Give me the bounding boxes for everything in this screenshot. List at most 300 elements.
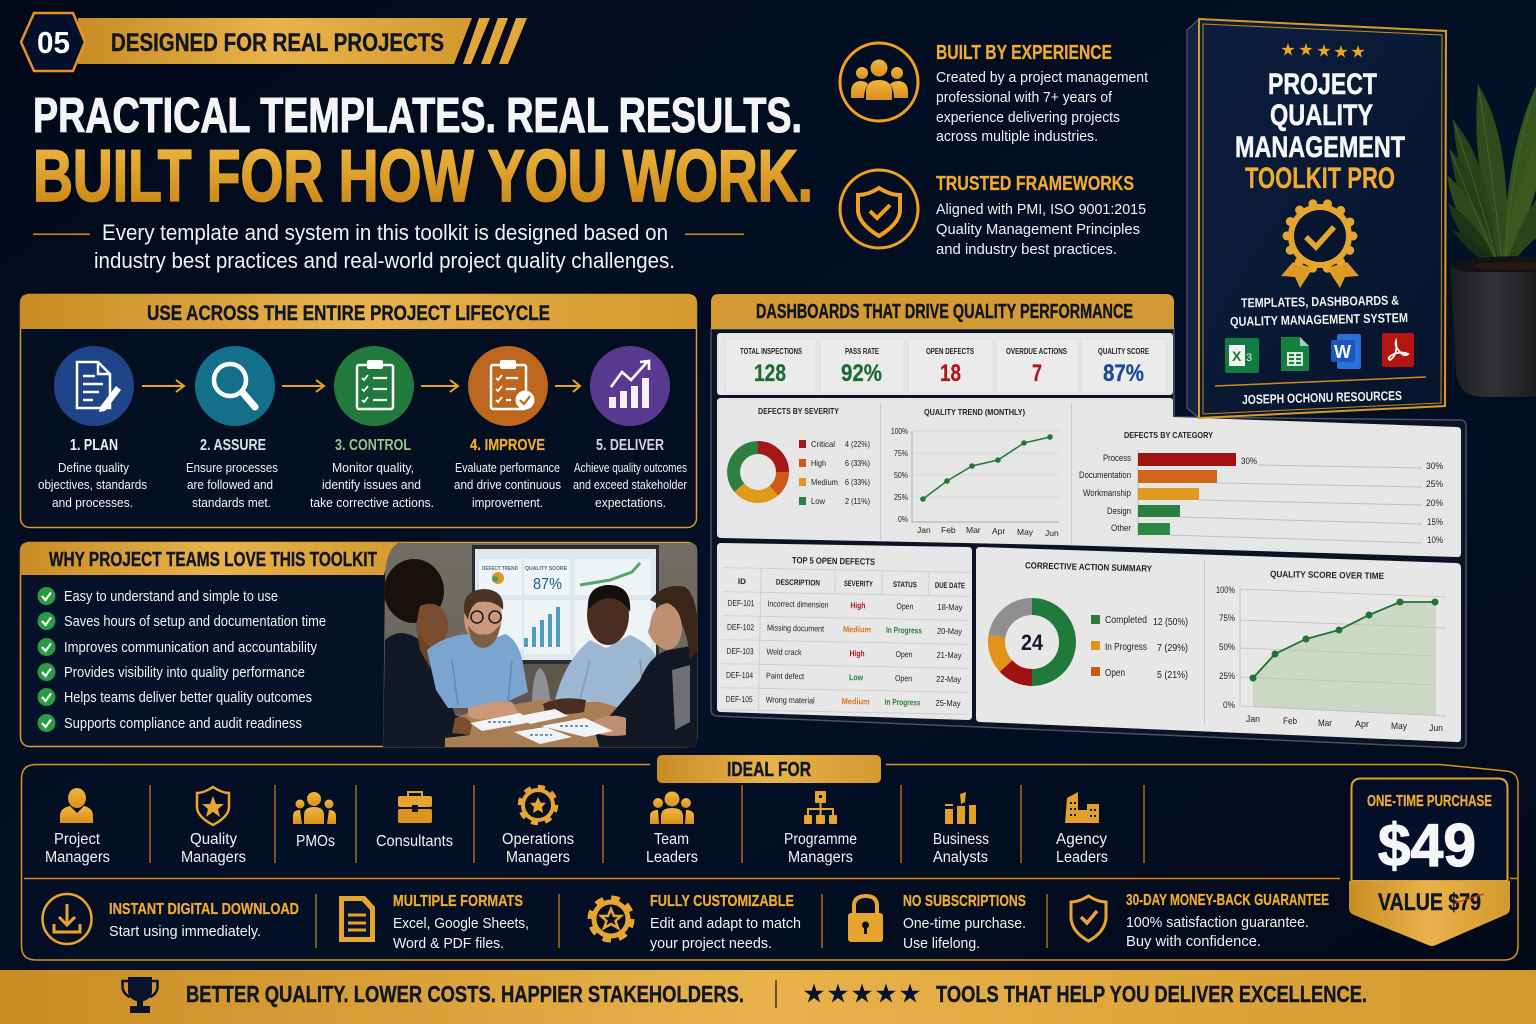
- benefit 4: Provides visibility into quality performance: [64, 665, 305, 681]
- chart: quality trend: [891, 407, 1059, 538]
- box publisher: JOSEPH OCHONU RESOURCES: [1242, 388, 1402, 407]
- panel header: [20, 542, 410, 575]
- table grid and cells: [720, 568, 970, 714]
- audience: consultants: [376, 792, 453, 850]
- step 4 improve: [454, 346, 561, 510]
- box stars: [1281, 43, 1365, 58]
- chart title: DEFECTS BY SEVERITY: [758, 406, 839, 416]
- dashboard heading: DASHBOARDS THAT DRIVE QUALITY PERFORMANCE: [756, 301, 1133, 323]
- table rows: Missing document: [767, 623, 825, 634]
- category labels: Design: [1107, 506, 1131, 516]
- step label: 5. DELIVER: [596, 437, 664, 454]
- icon: briefcase: [398, 792, 432, 823]
- trend axis labels: 100%: [891, 426, 908, 436]
- banner stripes: [463, 18, 527, 64]
- table: [445, 700, 697, 747]
- dashboard dark frame: [711, 329, 1466, 748]
- gold banner: [78, 18, 472, 64]
- step description: Monitor quality,: [332, 460, 414, 475]
- heading: TRUSTED FRAMEWORKS: [936, 173, 1134, 195]
- audience: operations managers: [502, 787, 574, 866]
- step description: objectives, standards: [38, 477, 147, 492]
- label: Managers: [506, 849, 570, 866]
- table rows: High: [849, 648, 865, 658]
- body text: professional with 7+ years of: [936, 89, 1113, 106]
- table rows: Medium: [843, 624, 871, 635]
- label: Consultants: [376, 833, 453, 850]
- icon: org chart: [804, 791, 837, 824]
- text: Buy with confidence.: [1126, 933, 1261, 950]
- table rows: DEF-103: [726, 646, 754, 656]
- action legend: 5 (21%): [1157, 670, 1188, 681]
- paper chart marks: [488, 722, 588, 735]
- icon: trophy: [122, 977, 158, 1013]
- label: Team: [654, 831, 689, 848]
- label: PMOs: [296, 833, 335, 850]
- benefit 3: Improves communication and accountability: [64, 640, 318, 656]
- score axes: [1240, 589, 1446, 716]
- credential: trusted frameworks: [840, 170, 1146, 258]
- label: [784, 831, 857, 866]
- category labels: 30%: [1241, 456, 1257, 466]
- text: Excel, Google Sheets,: [393, 915, 529, 932]
- label: [45, 831, 110, 866]
- body text: [936, 69, 1149, 145]
- icon: bars and flag: [945, 792, 976, 824]
- chart title: QUALITY TREND (MONTHLY): [924, 407, 1025, 417]
- score axis labels: 50%: [1219, 642, 1235, 653]
- footer tagline: BETTER QUALITY. LOWER COSTS. HAPPIER STAKEHOLDERS.: [186, 981, 744, 1007]
- step description: improvement.: [472, 495, 543, 510]
- chart: quality score over time: [1216, 569, 1446, 734]
- lower right charts background: [976, 547, 1461, 742]
- icon: Excel: [1225, 338, 1259, 373]
- wall screen: 87%: [533, 576, 562, 593]
- KPI total inspections: TOTAL INSPECTIONS: [740, 347, 802, 356]
- person 2: [427, 589, 528, 720]
- photo: team reviewing dashboard: [380, 540, 700, 750]
- text: Start using immediately.: [109, 923, 261, 940]
- audience: project managers: [45, 788, 110, 866]
- heading: BUILT BY EXPERIENCE: [936, 42, 1112, 64]
- severity legend: 6 (33%): [845, 458, 870, 468]
- table rows: Weld crack: [766, 646, 802, 657]
- footer stars: [804, 984, 920, 1002]
- arrow: [142, 380, 184, 392]
- step description: Achieve quality outcomes: [574, 460, 687, 475]
- score axis labels: 100%: [1216, 585, 1235, 596]
- step description: [310, 460, 434, 510]
- score axis labels: Mar: [1318, 718, 1332, 729]
- panel background: [20, 542, 696, 746]
- action legend: In Progress: [1105, 642, 1147, 653]
- table header row: DESCRIPTION: [776, 578, 820, 588]
- box inner gold border: [1203, 24, 1442, 414]
- table rows: In Progress: [885, 697, 921, 707]
- text: [1126, 914, 1309, 950]
- audience: team leaders: [646, 792, 698, 866]
- audience: quality managers: [181, 787, 246, 866]
- icon: padlock: [848, 896, 883, 942]
- score axis labels: 25%: [1219, 671, 1235, 682]
- step description: Ensure processes: [186, 460, 278, 475]
- box title: PROJECT: [1268, 68, 1377, 101]
- body text: Aligned with PMI, ISO 9001:2015: [936, 201, 1146, 218]
- icon: shield in circle: [840, 170, 918, 248]
- audience: PMOs: [293, 792, 336, 850]
- table rows: 21-May: [936, 650, 962, 660]
- arrow: [421, 380, 458, 392]
- KPI total inspections: 128: [754, 360, 786, 387]
- severity legend: Critical: [811, 439, 835, 449]
- chart title: CORRECTIVE ACTION SUMMARY: [1025, 560, 1152, 574]
- table rows: [726, 598, 963, 708]
- benefits checklist: [38, 587, 326, 732]
- label: Managers: [788, 849, 853, 866]
- wall screen: [472, 545, 659, 664]
- text: [650, 915, 801, 952]
- icon: PDF: [1382, 333, 1414, 367]
- icon: document: [339, 896, 375, 942]
- header badge: section number and label: [21, 13, 527, 71]
- audience: agency leaders: [1056, 792, 1108, 866]
- step description: [186, 460, 278, 510]
- severity legend: 6 (33%): [845, 477, 870, 487]
- table rows: Low: [849, 672, 864, 682]
- score axis labels: Jan: [1246, 714, 1260, 725]
- category labels: 15%: [1427, 517, 1443, 527]
- score axis labels: Jun: [1429, 723, 1443, 734]
- number 05: 05: [37, 25, 70, 60]
- table: top 5 open defects: [717, 543, 972, 720]
- icon: gear: [590, 898, 632, 940]
- chart: defects by category: [1079, 430, 1443, 545]
- icon: download: [42, 894, 92, 944]
- step 3 control: [310, 346, 434, 510]
- icon: clipboard checklist: [334, 346, 414, 426]
- audience: programme managers: [784, 791, 857, 866]
- KPI pass rate: PASS RATE: [845, 347, 879, 356]
- icon: Excel: 3: [1246, 352, 1252, 364]
- subtitle lines: Every template and system in this toolkit is designed based on: [102, 220, 668, 245]
- severity legend: 2 (11%): [845, 496, 870, 506]
- benefit 5: Helps teams deliver better quality outcomes: [64, 690, 312, 706]
- step description: standards met.: [192, 495, 271, 510]
- action legend: Completed: [1105, 615, 1147, 626]
- icon: Google Sheets: [1281, 337, 1309, 371]
- step 1 plan: [38, 346, 147, 510]
- KPI overdue actions: [996, 339, 1078, 393]
- footer message: TOOLS THAT HELP YOU DELIVER EXCELLENCE.: [936, 981, 1367, 1007]
- step label: 2. ASSURE: [200, 437, 266, 454]
- table rows: Medium: [842, 696, 870, 706]
- title line 2: BUILT FOR HOW YOU WORK.: [33, 136, 813, 217]
- box subtitle: TEMPLATES, DASHBOARDS &: [1241, 293, 1399, 310]
- trend axis labels: Apr: [992, 526, 1005, 536]
- label: [1056, 831, 1108, 866]
- value ribbon: [1349, 881, 1510, 946]
- step description: identify issues and: [322, 477, 421, 492]
- dashboard header: [711, 294, 1174, 329]
- table header row: DUE DATE: [935, 581, 965, 590]
- KPI quality score: [1081, 339, 1166, 393]
- box title: TOOLKIT PRO: [1245, 162, 1395, 195]
- step description: take corrective actions.: [310, 495, 434, 510]
- icon: buildings: [1065, 792, 1099, 823]
- icon: team: [650, 792, 694, 824]
- donut total: 24: [1021, 630, 1044, 655]
- person 1: [383, 559, 472, 750]
- text: One-time purchase.: [903, 915, 1026, 932]
- credential: built by experience: [840, 42, 1149, 145]
- box title: QUALITY: [1270, 99, 1373, 132]
- table rows: Paint defect: [766, 670, 805, 681]
- trend axis labels: 25%: [894, 492, 908, 502]
- person 4: [592, 586, 698, 750]
- trend axis labels: Jun: [1045, 528, 1059, 538]
- trend axis labels: Feb: [941, 525, 956, 535]
- tab: ideal for: IDEAL FOR: [727, 759, 811, 781]
- category grid: [1138, 450, 1422, 543]
- icon: Word: [1331, 334, 1361, 369]
- box divider: [1215, 377, 1426, 386]
- table panel: [717, 543, 972, 720]
- label: Managers: [45, 849, 110, 866]
- score axis labels: 0%: [1223, 700, 1235, 711]
- step 2 assure: [186, 346, 278, 510]
- trend axis labels: May: [1017, 527, 1034, 537]
- KPI open defects: [908, 339, 993, 393]
- plant in black pot: [1447, 85, 1536, 397]
- table rows: Open: [895, 649, 913, 659]
- chart: defects by severity: [734, 406, 870, 506]
- text: 100% satisfaction guarantee.: [1126, 914, 1309, 931]
- heading: INSTANT DIGITAL DOWNLOAD: [109, 901, 299, 918]
- KPI pass rate: [820, 339, 904, 393]
- text: [393, 915, 529, 952]
- table rows: DEF-102: [727, 622, 754, 632]
- hexagon number: [21, 13, 85, 71]
- KPI quality score: QUALITY SCORE: [1098, 347, 1150, 356]
- box spine: [1187, 19, 1199, 418]
- severity donut: [734, 448, 782, 496]
- category labels: Other: [1111, 523, 1131, 533]
- subtitle: industry best practices and real-world project quality challenges.: [94, 248, 675, 273]
- category labels: Process: [1103, 453, 1131, 463]
- table rows: Open: [895, 673, 912, 683]
- chart: corrective action summary: [997, 560, 1204, 724]
- category labels: [1079, 453, 1443, 545]
- category labels: 30%: [1426, 461, 1443, 471]
- panel: project lifecycle: [20, 294, 697, 528]
- table rows: 18-May: [937, 602, 963, 612]
- step label: 4. IMPROVE: [470, 437, 545, 454]
- frame outlines: [22, 764, 1518, 960]
- severity legend: Low: [811, 496, 826, 506]
- box title: MANAGEMENT: [1235, 131, 1405, 164]
- chart title: DEFECTS BY CATEGORY: [1124, 430, 1213, 440]
- step description: and exceed stakeholder: [573, 477, 688, 492]
- icon: document and pen: [54, 346, 134, 426]
- icon: star shield: [197, 787, 229, 825]
- panel: dashboards: [711, 294, 1466, 748]
- table rows: DEF-104: [726, 670, 753, 680]
- feature: money-back guarantee: [1071, 892, 1329, 950]
- arrow: [555, 380, 580, 392]
- label: [933, 831, 989, 866]
- severity legend: [799, 439, 870, 506]
- arrow: [282, 380, 324, 392]
- step label: 1. PLAN: [70, 437, 118, 454]
- category labels: Workmanship: [1083, 488, 1131, 498]
- panel heading: USE ACROSS THE ENTIRE PROJECT LIFECYCLE: [147, 302, 550, 325]
- title line 1: PRACTICAL TEMPLATES. REAL RESULTS.: [33, 89, 802, 143]
- text: Word & PDF files.: [393, 935, 504, 952]
- category labels: Documentation: [1079, 470, 1131, 480]
- heading: FULLY CUSTOMIZABLE: [650, 893, 794, 910]
- action legend: Open: [1105, 668, 1125, 679]
- text: Use lifelong.: [903, 935, 980, 952]
- benefit 6: Supports compliance and audit readiness: [64, 716, 302, 732]
- step description: Evaluate performance: [455, 460, 560, 475]
- table title: TOP 5 OPEN DEFECTS: [792, 555, 875, 567]
- table rows: DEF-105: [726, 694, 753, 704]
- body text: experience delivering projects: [936, 109, 1120, 126]
- table header row: ID: [738, 577, 746, 586]
- icon: rising bar chart: [590, 346, 670, 426]
- KPI total inspections: [725, 339, 816, 393]
- KPI row: [717, 333, 1173, 395]
- score axis labels: Feb: [1283, 716, 1297, 727]
- category labels: 10%: [1427, 535, 1443, 545]
- trend axis labels: 75%: [894, 448, 908, 458]
- label: Managers: [181, 849, 246, 866]
- label: [646, 831, 698, 866]
- trend axis labels: [891, 426, 1059, 538]
- plant pot: [1450, 256, 1536, 397]
- label: Operations: [502, 831, 574, 848]
- price outline: [1352, 778, 1508, 881]
- action legend: [1091, 615, 1188, 681]
- KPI open defects: 18: [940, 360, 961, 387]
- trend axis labels: Mar: [966, 525, 981, 535]
- label: [181, 831, 246, 866]
- icon: magnifier: [195, 346, 275, 426]
- score area: [1253, 602, 1436, 716]
- severity legend: High: [811, 458, 826, 468]
- feature: multiple formats: [339, 893, 529, 952]
- table rows: Wrong material: [766, 694, 815, 705]
- score line: [1250, 598, 1438, 682]
- laptop chair back: [532, 668, 550, 702]
- step 5 deliver: [573, 346, 688, 510]
- action donut: [997, 606, 1068, 678]
- step description: Define quality: [58, 460, 129, 475]
- KPI quality score: 87%: [1103, 360, 1144, 387]
- body text: Created by a project management: [936, 69, 1149, 86]
- severity legend: 4 (22%): [845, 439, 870, 449]
- product box: [1187, 19, 1446, 418]
- body text: and industry best practices.: [936, 241, 1117, 258]
- panel header: [20, 294, 697, 329]
- wall screen: QUALITY SCORE: [525, 566, 568, 572]
- action legend: 12 (50%): [1153, 617, 1188, 628]
- body text: [936, 201, 1146, 258]
- label: Analysts: [933, 849, 988, 866]
- chart title: QUALITY SCORE OVER TIME: [1270, 569, 1384, 581]
- action legend: 7 (29%): [1157, 643, 1188, 654]
- body text: across multiple industries.: [936, 128, 1098, 145]
- person 3: [543, 585, 664, 714]
- benefit 1: Easy to understand and simple to use: [64, 589, 278, 605]
- icon: clipboard with check badge: [468, 346, 548, 426]
- feature: instant digital download: [42, 894, 299, 944]
- KPI overdue actions: 7: [1032, 360, 1042, 387]
- table header row: STATUS: [893, 580, 917, 589]
- banner label: DESIGNED FOR REAL PROJECTS: [111, 29, 444, 57]
- subtitle: [33, 220, 744, 273]
- icon: people in circle: [840, 43, 918, 121]
- icon: person: [60, 788, 93, 823]
- trend axis labels: 0%: [898, 514, 908, 524]
- heading: MULTIPLE FORMATS: [393, 893, 523, 910]
- KPI open defects: OPEN DEFECTS: [926, 347, 975, 356]
- plant leaves: [1447, 85, 1536, 265]
- step label: 3. CONTROL: [335, 437, 411, 454]
- step description: [454, 460, 561, 510]
- table rows: Incorrect dimension: [767, 599, 829, 610]
- wall screen: DEFECT TREND: [482, 566, 518, 572]
- box title: [1235, 68, 1405, 195]
- step description: are followed and: [187, 477, 273, 492]
- price amount: $49: [1378, 812, 1476, 879]
- table rows: Open: [896, 601, 914, 611]
- step description: [573, 460, 688, 510]
- step description: and processes.: [52, 495, 133, 510]
- table header row: SEVERITY: [844, 579, 873, 589]
- papers on table: [470, 709, 613, 744]
- label: Leaders: [1056, 849, 1108, 866]
- category labels: 20%: [1426, 498, 1443, 508]
- box front: [1199, 19, 1446, 418]
- icon: Excel: X: [1232, 348, 1242, 364]
- value text: VALUE $79: [1378, 889, 1481, 916]
- box subtitle: [1230, 293, 1408, 329]
- heading: NO SUBSCRIPTIONS: [903, 893, 1026, 910]
- panel heading: WHY PROJECT TEAMS LOVE THIS TOOLKIT: [49, 549, 377, 571]
- score axis labels: [1216, 585, 1443, 734]
- table header row: [738, 577, 965, 590]
- label: Leaders: [646, 849, 698, 866]
- footer banner: [0, 970, 1536, 1024]
- icon: award badge: [1281, 203, 1359, 288]
- panel: why project teams love this toolkit: [20, 540, 700, 750]
- middle charts background: [717, 398, 1461, 557]
- table rows: In Progress: [886, 625, 922, 635]
- KPI overdue actions: OVERDUE ACTIONS: [1006, 347, 1068, 356]
- step description: expectations.: [595, 495, 666, 510]
- trend axes and grid: [912, 431, 1059, 497]
- score axis labels: May: [1391, 721, 1407, 732]
- section: ideal for and features frame: [22, 755, 1518, 960]
- text: Edit and adapt to match: [650, 915, 801, 932]
- severity legend: Medium: [811, 477, 838, 487]
- table rows: High: [850, 600, 866, 610]
- label: Business: [933, 831, 989, 848]
- category labels: 25%: [1426, 479, 1443, 489]
- benefit 2: Saves hours of setup and documentation time: [64, 614, 326, 630]
- label: Quality: [190, 831, 237, 848]
